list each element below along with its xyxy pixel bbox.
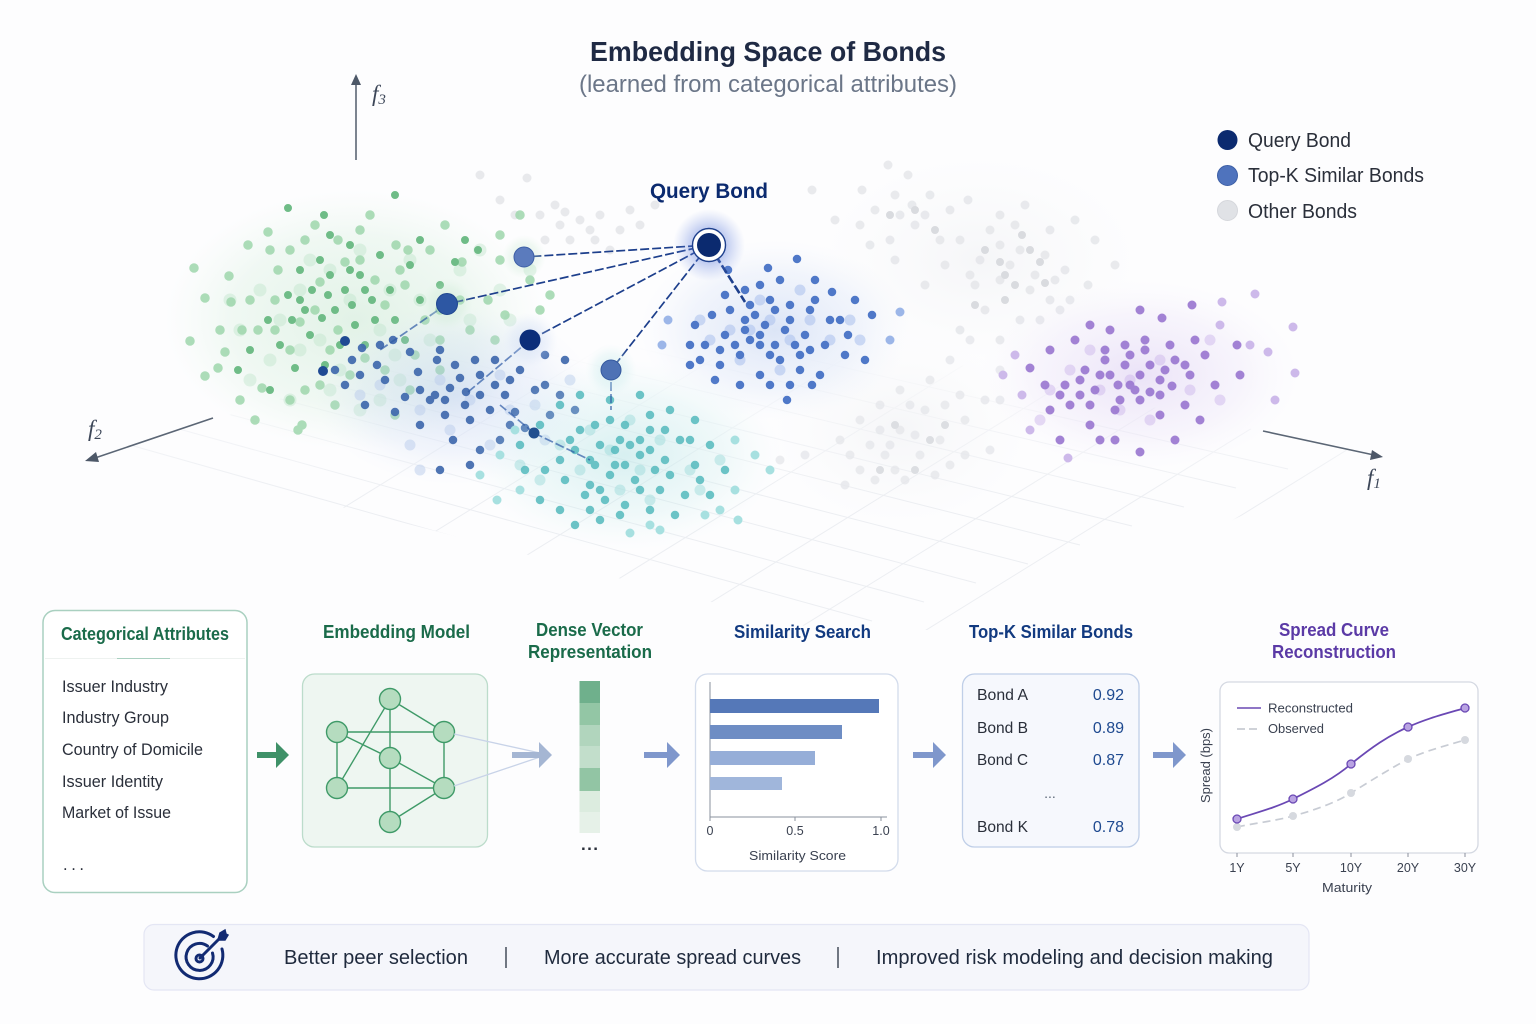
heading: spread curve reconstruction: Spread Curve — [1279, 620, 1389, 640]
panel: top-k table: Bond C — [977, 752, 1028, 769]
panel: spread curve chart — [1199, 682, 1478, 895]
heading: embedding model: Embedding Model — [323, 622, 470, 642]
heading: similarity search: Similarity Search — [734, 622, 871, 642]
panel: spread curve chart: Spread (bps) — [1199, 728, 1213, 803]
panel: spread curve chart: Maturity — [1322, 881, 1373, 895]
panel: categorical attributes: Issuer Identity — [62, 773, 164, 791]
legend: Top-K Similar Bonds — [1248, 165, 1424, 187]
panel: top-k table — [962, 674, 1139, 847]
arrow: model to vector — [454, 734, 552, 786]
legend — [1218, 130, 1424, 223]
panel: categorical attributes: Industry Group — [62, 709, 169, 727]
panel: benefits bar: Better peer selection — [284, 947, 468, 969]
panel: top-k table: 0.92 — [1093, 687, 1124, 704]
panel: top-k table: ... — [1044, 785, 1056, 801]
axis f1: f — [1367, 465, 1373, 490]
axis f3: f — [372, 81, 378, 106]
panel: categorical attributes: Categorical Attributes — [61, 624, 229, 644]
panel: similarity search chart: 1.0 — [872, 824, 890, 838]
teal cluster — [470, 360, 780, 550]
panel: spread curve chart: 10Y — [1340, 861, 1363, 875]
axis f1: 1 — [1373, 476, 1381, 492]
panel: top-k table: Bond B — [977, 720, 1028, 737]
arrow: search to top-k — [913, 742, 946, 768]
panel: spread curve chart: 1Y — [1229, 861, 1245, 875]
legend: Other Bonds — [1248, 201, 1357, 223]
panel: spread curve chart: 5Y — [1285, 861, 1301, 875]
query bond marker — [673, 209, 745, 281]
panel: similarity search chart: 0 — [707, 824, 714, 838]
axis f3 — [351, 74, 386, 160]
panel: top-k table: 0.87 — [1093, 752, 1124, 769]
axis f2: f — [88, 416, 94, 441]
heading: dense vector — [528, 620, 652, 662]
query bond label: Query Bond — [650, 180, 768, 203]
blue cluster right — [640, 240, 910, 420]
axis f2 — [85, 416, 213, 462]
panel: categorical attributes: ... — [63, 856, 84, 874]
panel: categorical attributes: Country of Domicile — [62, 741, 203, 759]
heading: spread curve reconstruction: Reconstruction — [1272, 642, 1396, 662]
dense vector bar — [580, 681, 600, 854]
panel: spread curve chart: 20Y — [1397, 861, 1420, 875]
panel: similarity search chart — [696, 674, 898, 871]
axis f2: 2 — [94, 427, 102, 443]
axis f3: 3 — [377, 92, 386, 108]
heading: dense vector: Dense Vector — [536, 620, 643, 640]
icon: target with arrow — [176, 930, 228, 979]
panel: similarity search chart: Similarity Score — [749, 849, 846, 863]
axis f1 — [1263, 431, 1383, 492]
panel: spread curve chart: Observed — [1268, 722, 1324, 736]
subtitle: (learned from categorical attributes) — [579, 71, 957, 98]
panel: embedding network — [302, 674, 488, 847]
panel: benefits bar — [144, 924, 1309, 990]
dense vector bar: ... — [581, 835, 598, 854]
panel: benefits bar: More accurate spread curves — [544, 947, 801, 969]
panel: top-k table: Bond A — [977, 687, 1028, 704]
purple cluster — [980, 280, 1300, 470]
panel: categorical attributes: Issuer Industry — [62, 678, 169, 696]
panel: spread curve chart: Reconstructed — [1268, 702, 1353, 716]
title: Embedding Space of Bonds — [590, 36, 946, 67]
panel: spread curve chart: 30Y — [1454, 861, 1477, 875]
legend: Query Bond — [1248, 130, 1351, 152]
blue cluster left — [315, 305, 595, 485]
heading: spread curve reconstruction — [1272, 620, 1396, 662]
panel: top-k table: 0.78 — [1093, 819, 1124, 836]
heading: top-k similar bonds: Top-K Similar Bonds — [969, 622, 1133, 642]
top-k similar bonds nodes — [421, 235, 637, 438]
panel: benefits bar: Improved risk modeling and decision making — [876, 947, 1273, 969]
panel: categorical attributes: Market of Issue — [62, 804, 171, 822]
panel: top-k table: Bond K — [977, 819, 1028, 836]
panel: categorical attributes — [43, 610, 247, 892]
connection lines from query bond — [380, 245, 745, 460]
heading: dense vector: Representation — [528, 642, 652, 662]
ground grid — [133, 416, 1347, 630]
panel: similarity search chart: 0.5 — [786, 824, 804, 838]
panel: top-k table: 0.89 — [1093, 720, 1124, 737]
arrow: vector to search — [644, 742, 680, 768]
gray cluster: other bonds — [480, 155, 1140, 525]
arrow: attributes to model — [257, 742, 289, 768]
arrow: top-k to curve — [1153, 742, 1186, 768]
green cluster — [165, 190, 550, 450]
